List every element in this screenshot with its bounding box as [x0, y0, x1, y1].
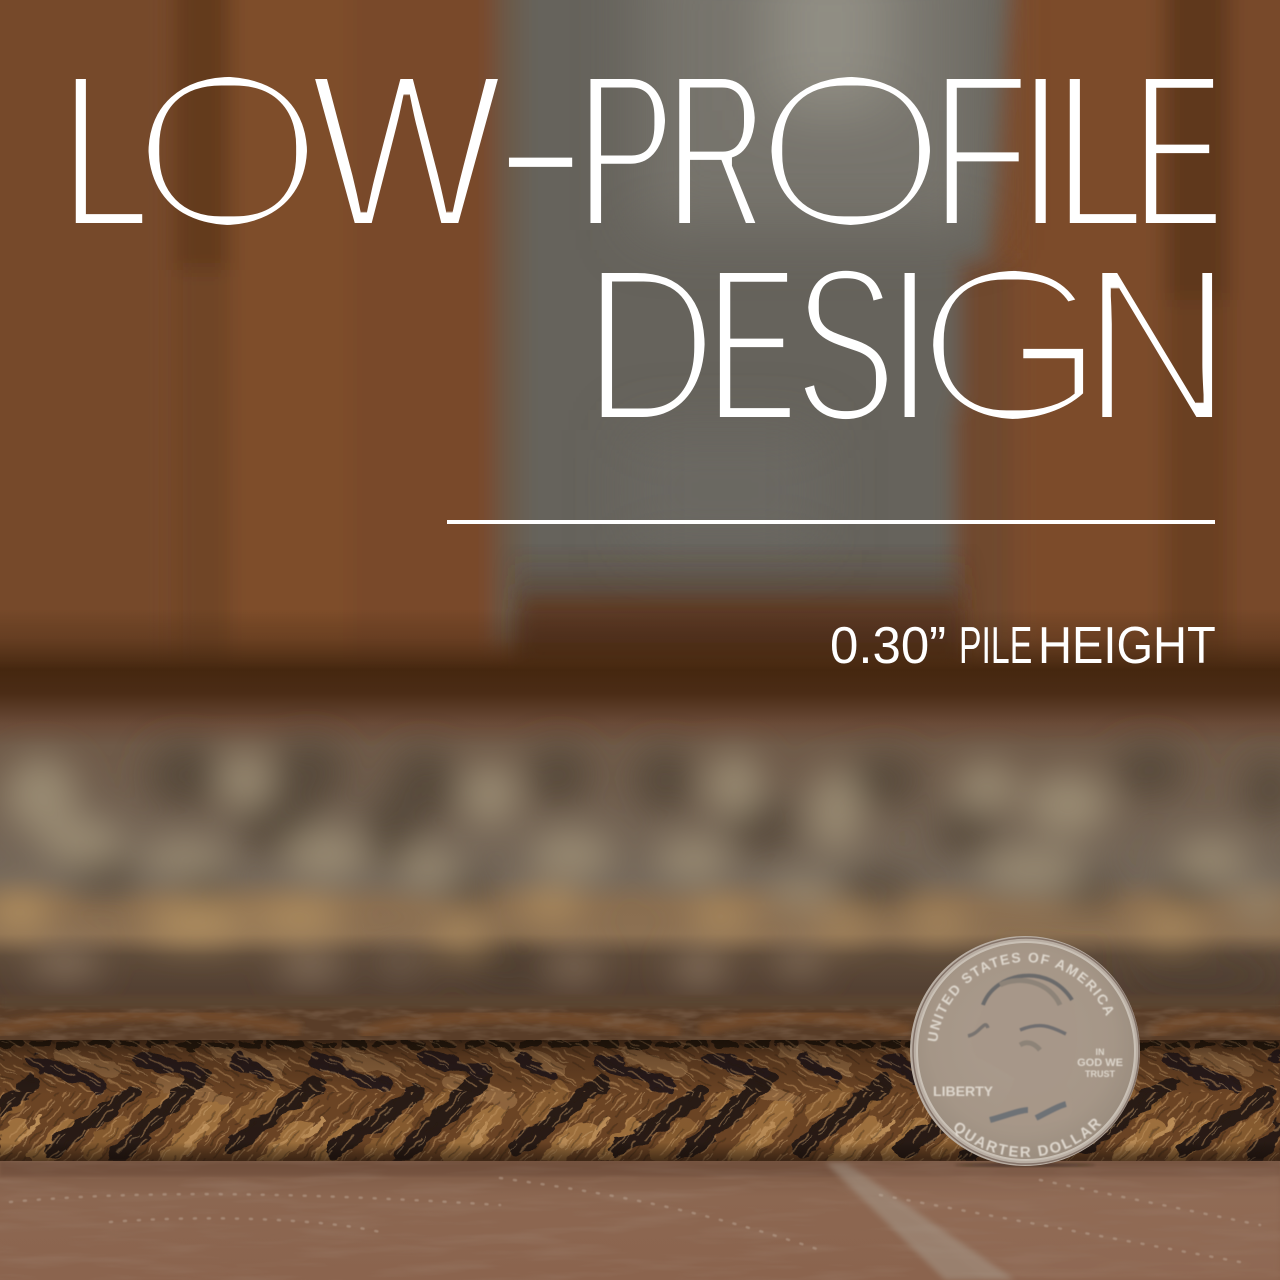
title: LOW-PROFILE DESIGN: D	[582, 221, 717, 468]
rug top edge: soft fibres	[0, 996, 1280, 1042]
background: blurred wall with brown panels and grey doorway	[0, 0, 1280, 720]
wooden floor with plank seam	[0, 1161, 1280, 1280]
coin portrait	[968, 976, 1077, 1126]
coin lettering: LIBERTY	[933, 1083, 994, 1099]
divider line	[447, 520, 1215, 524]
quarter coin	[910, 936, 1140, 1168]
subtitle: pile height: PILE	[959, 617, 1032, 675]
title: LOW-PROFILE DESIGN: E	[708, 221, 797, 468]
title: LOW-PROFILE DESIGN: E	[1134, 27, 1223, 274]
title: LOW-PROFILE DESIGN: R	[667, 27, 766, 274]
subtitle: pile height: HEIGHT	[1038, 617, 1216, 675]
title: LOW-PROFILE DESIGN: L	[60, 27, 150, 274]
title: LOW-PROFILE DESIGN: O	[130, 27, 325, 274]
title: LOW-PROFILE DESIGN: S	[795, 221, 895, 468]
background: blurred rug surface	[0, 610, 1280, 1010]
subtitle: pile height	[830, 617, 1216, 675]
title: LOW-PROFILE DESIGN: -	[492, 21, 589, 268]
subtitle: pile height: 0.30”	[830, 617, 946, 675]
coin lettering: IN	[1096, 1047, 1104, 1057]
coin lettering: QUARTER DOLLAR	[954, 1118, 1102, 1158]
title: LOW-PROFILE DESIGN: I	[890, 221, 929, 468]
coin lettering: TRUST	[1085, 1069, 1115, 1079]
title: LOW-PROFILE DESIGN: N	[1081, 221, 1233, 468]
title: LOW-PROFILE DESIGN: W	[309, 27, 504, 274]
title: LOW-PROFILE DESIGN: P	[576, 27, 674, 274]
title: LOW-PROFILE DESIGN	[60, 21, 1233, 468]
coin lettering: UNITED STATES OF AMERICA	[927, 952, 1114, 1042]
coin lettering: GOD WE	[1077, 1057, 1123, 1069]
title: LOW-PROFILE DESIGN: O	[753, 27, 948, 274]
title: LOW-PROFILE DESIGN: G	[914, 221, 1108, 468]
braided jute rug edge	[0, 1040, 1280, 1162]
title: LOW-PROFILE DESIGN: I	[1021, 27, 1060, 274]
title: LOW-PROFILE DESIGN: F	[931, 27, 1029, 274]
title: LOW-PROFILE DESIGN: L	[1054, 27, 1144, 274]
coin lettering	[927, 952, 1123, 1158]
